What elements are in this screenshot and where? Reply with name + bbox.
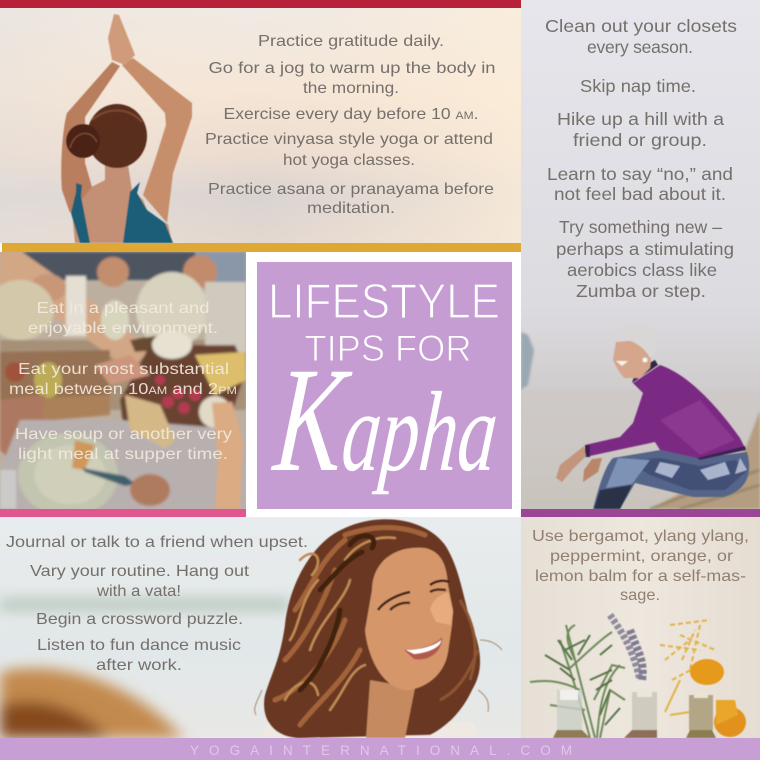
movement tips text: Zumba or step. [576, 281, 706, 301]
mood tips text: Begin a crossword puzzle. [36, 611, 243, 628]
purple divider bar [521, 509, 760, 517]
morning tips text: Practice vinyasa style yoga or attend [205, 131, 493, 148]
meal tips text: Eat in a pleasant and [36, 300, 210, 317]
meal tips text [9, 300, 237, 463]
morning tips text: hot yoga classes. [283, 152, 415, 169]
movement tips text: Clean out your closets [545, 16, 737, 36]
movement tips text [545, 16, 737, 301]
footer band with website [0, 738, 760, 760]
movement tips text: friend or group. [573, 130, 707, 150]
aromatherapy text: lemon balm for a self-mas- [535, 568, 746, 585]
morning tips text: Go for a jog to warm up the body in [208, 60, 496, 77]
morning tips text: Practice gratitude daily. [258, 33, 444, 50]
pink divider bar [0, 509, 246, 517]
movement tips text: perhaps a stimulating [556, 239, 734, 259]
meal tips text: Eat your most substantial [18, 361, 229, 378]
movement tips text: not feel bad about it. [554, 184, 726, 204]
morning tips text: meditation. [307, 200, 395, 217]
aromatherapy text: Use bergamot, ylang ylang, [532, 528, 749, 545]
photo: herbs and glass bottles on pale wood [521, 517, 760, 738]
mood tips text [6, 534, 308, 674]
panel: aromatherapy tip [521, 517, 760, 738]
photo: shared table from above [0, 252, 246, 517]
movement tips text: Try something new – [559, 217, 722, 237]
mood tips text: Journal or talk to a friend when upset. [6, 534, 308, 551]
panel: movement and mindset tips [521, 0, 760, 509]
meal tips text: meal between 10 AM and 2 PM [9, 381, 237, 398]
aromatherapy text: peppermint, orange, or [550, 548, 734, 565]
meal tips text: light meal at supper time. [18, 446, 228, 463]
movement tips text: Hike up a hill with a [557, 109, 724, 129]
panel: meal tips [0, 252, 246, 517]
morning tips text: Practice asana or pranayama before [208, 181, 494, 198]
movement tips text: every season. [587, 37, 693, 57]
mood tips text: with a vata! [96, 583, 181, 600]
movement tips text: aerobics class like [567, 260, 717, 280]
morning tips text: the morning. [303, 80, 399, 97]
gold divider bar [2, 243, 521, 252]
movement tips text: Learn to say “no,” and [547, 164, 733, 184]
photo: woman in yoga pose at the sea [0, 8, 521, 243]
mood tips text: Listen to fun dance music [37, 637, 241, 654]
title: Kapha script: Kapha [268, 336, 506, 503]
title: lifestyle: LIFESTYLE [268, 275, 500, 329]
mood tips text: Vary your routine. Hang out [30, 563, 250, 580]
meal tips text: enjoyable environment. [28, 320, 218, 337]
title: tips for: TIPS FOR [304, 328, 472, 369]
meal tips text: Have soup or another very [15, 426, 232, 443]
panel: mood and routine tips [0, 517, 521, 738]
photo: woman in purple jacket resting on a foggy beach [521, 0, 760, 509]
photo: smiling woman with curly hair [0, 517, 521, 738]
footer band with website: YOGAINTERNATIONAL.COM [190, 743, 572, 758]
aromatherapy text [532, 528, 749, 604]
top red bar [0, 0, 521, 8]
aromatherapy text: sage. [620, 587, 660, 604]
title panel [257, 262, 512, 509]
morning tips text: Exercise every day before 10 AM. [224, 106, 478, 123]
panel: morning practice tips [0, 8, 521, 243]
mood tips text: after work. [96, 657, 182, 674]
morning tips text [205, 33, 496, 217]
movement tips text: Skip nap time. [580, 76, 696, 96]
